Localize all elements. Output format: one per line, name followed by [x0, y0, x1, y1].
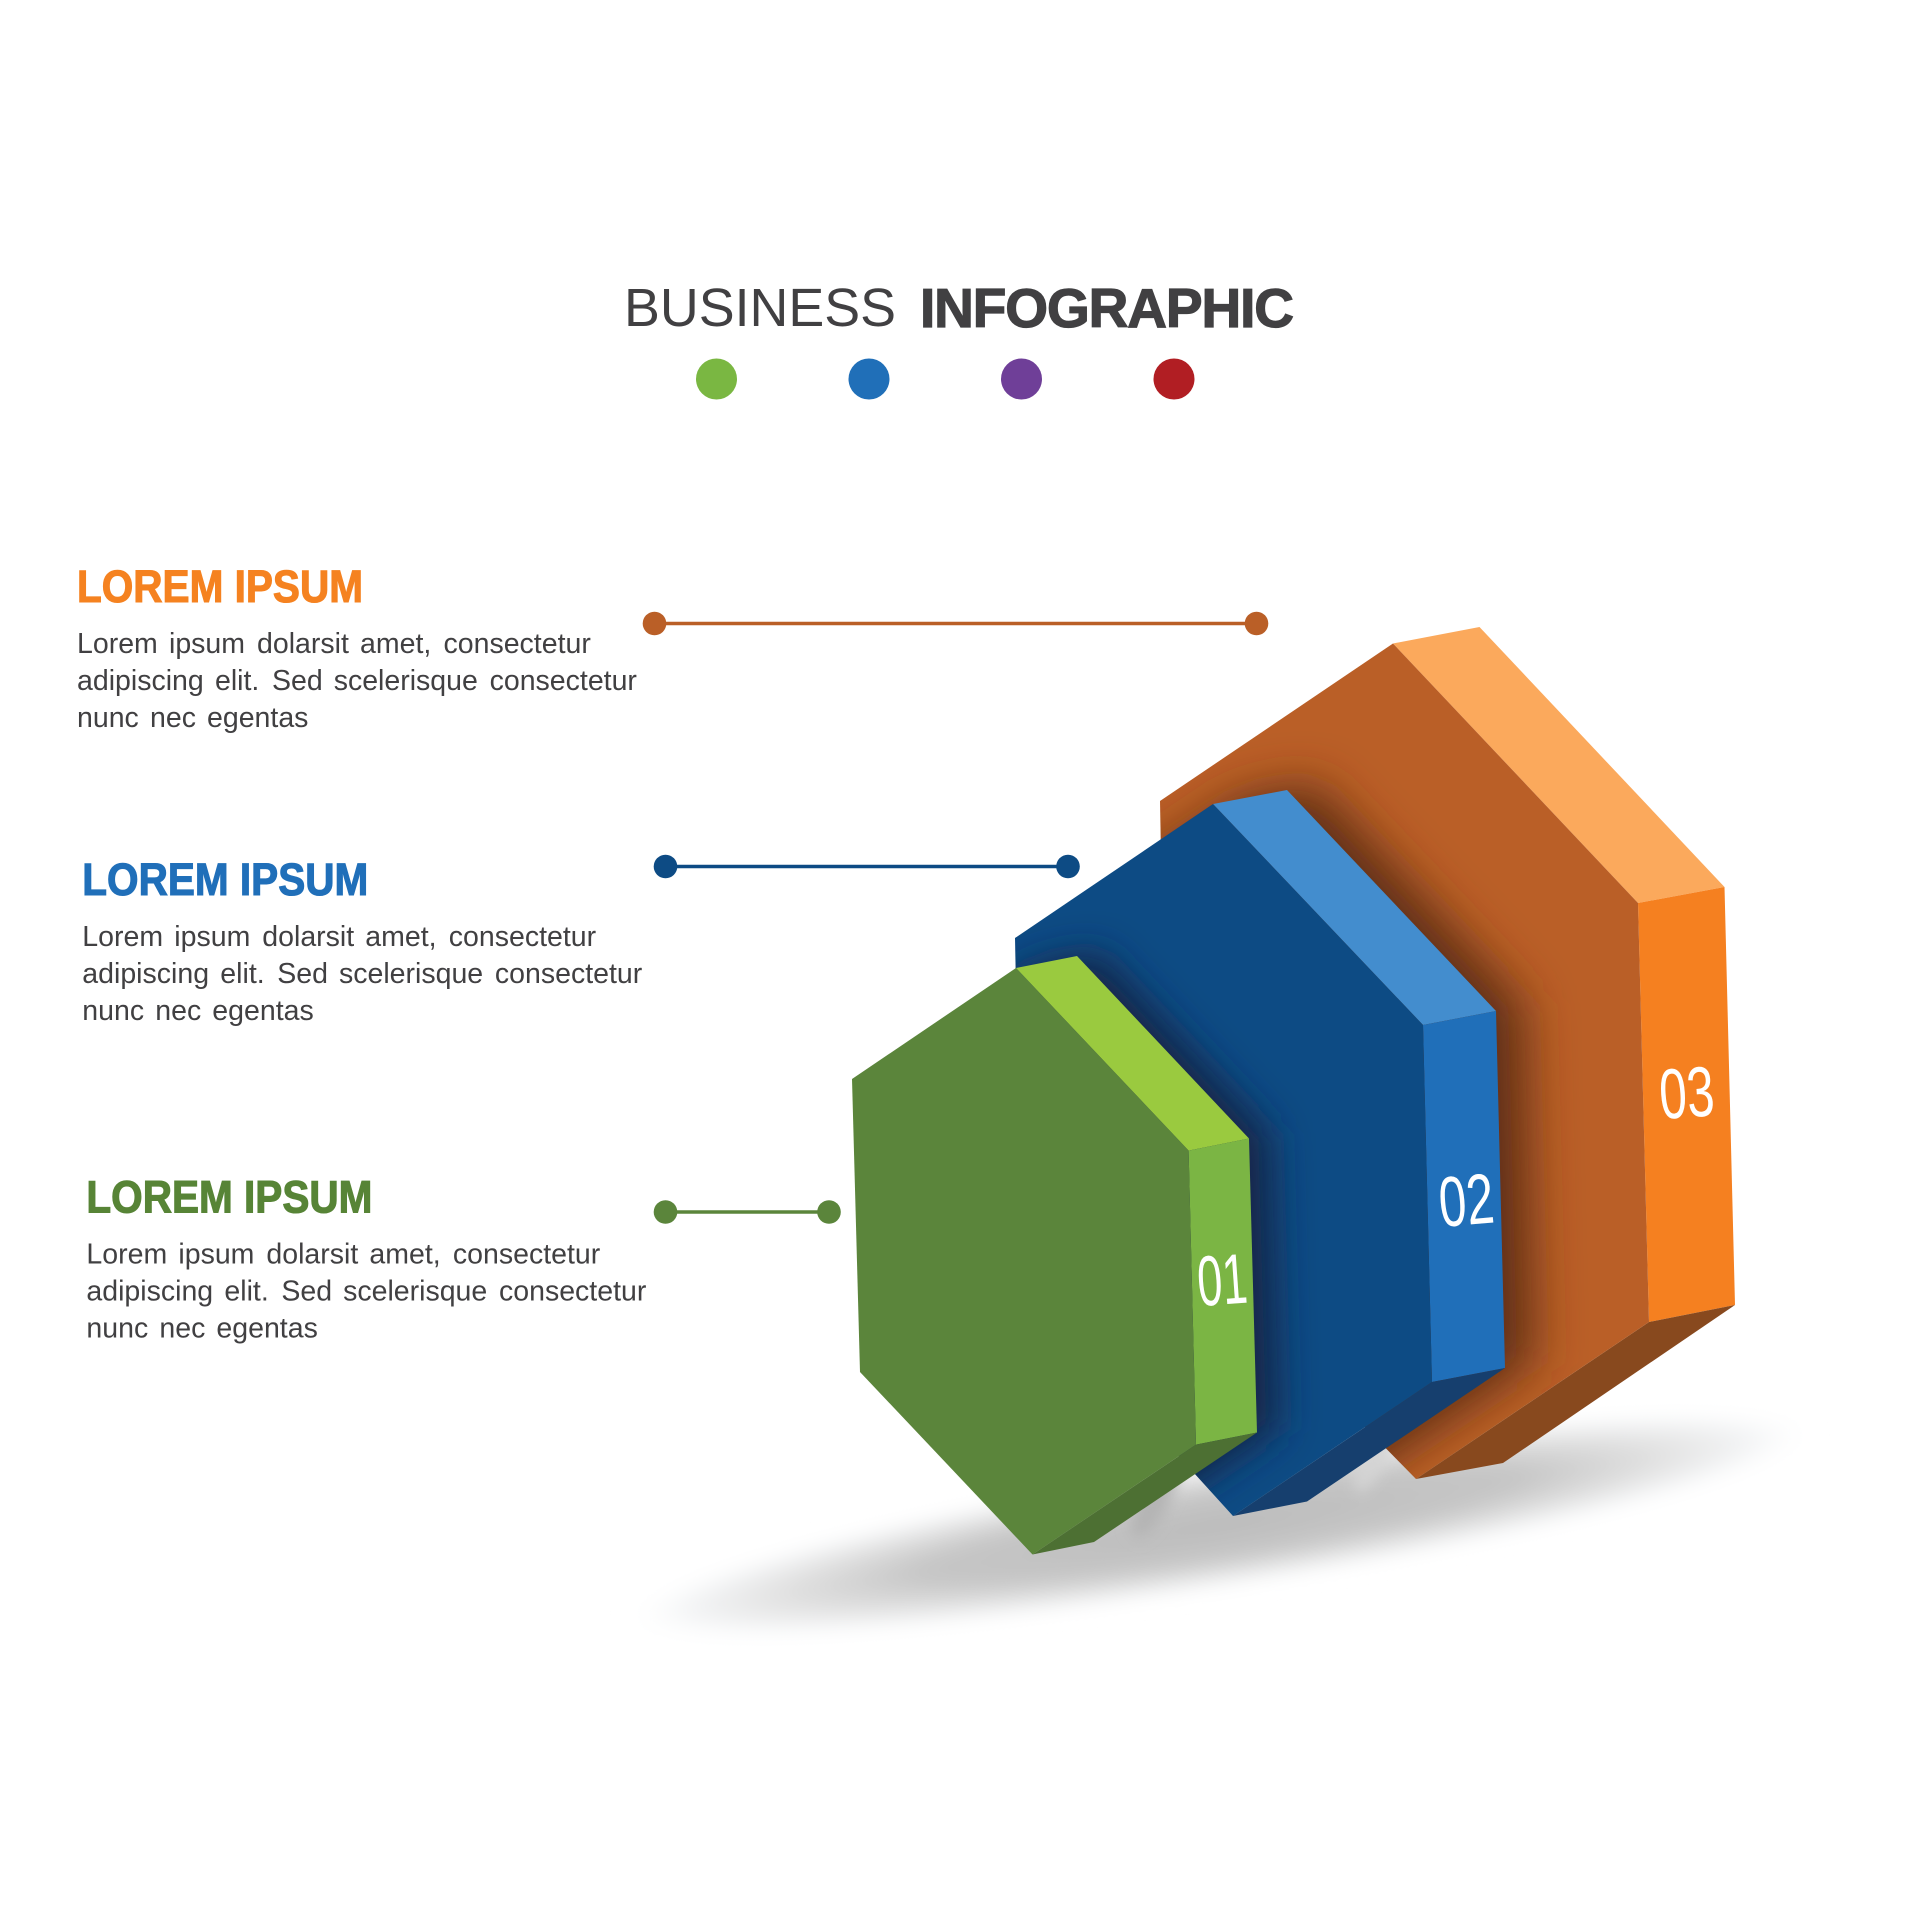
text block: blue: Sed	[277, 958, 328, 990]
orange side face	[1638, 887, 1735, 1322]
green top face	[1016, 956, 1249, 1151]
hexagon 02: blue	[1015, 790, 1505, 1516]
text block: green: consectetur	[499, 1276, 647, 1308]
text block: green: LOREM IPSUM	[86, 1172, 372, 1222]
text block: green: consectetur	[453, 1238, 601, 1270]
text block: blue: dolarsit	[262, 921, 354, 953]
orange top face	[1393, 627, 1724, 903]
connector: green	[654, 1200, 841, 1224]
text block: green: amet,	[369, 1238, 441, 1270]
orange front face	[1160, 644, 1649, 1479]
text block: orange: ipsum	[169, 628, 245, 660]
text block: orange: Sed	[272, 665, 323, 697]
text block: blue: Lorem	[82, 921, 163, 953]
blue side face	[1423, 1011, 1505, 1382]
blue bottom face	[1233, 1368, 1505, 1516]
text block: orange: Lorem	[77, 628, 158, 660]
text block: green: egentas	[216, 1312, 318, 1344]
text block: green: Lorem	[86, 1238, 167, 1270]
text block: green: ipsum	[178, 1238, 254, 1270]
text block: blue: nec	[155, 995, 201, 1027]
text block: green: nunc	[86, 1312, 148, 1344]
blue front face	[1015, 804, 1432, 1516]
number 01: 01	[1195, 1240, 1250, 1322]
text block: orange: scelerisque	[334, 665, 478, 697]
number 03: 03	[1657, 1052, 1717, 1135]
text block: orange: dolarsit	[257, 628, 349, 660]
connector: blue	[654, 855, 1080, 878]
text block: blue	[82, 854, 643, 1027]
text block: green: Sed	[281, 1276, 332, 1308]
text block: orange: elit.	[215, 665, 259, 697]
legend dots	[696, 358, 1194, 400]
text block: orange: consectetur	[490, 665, 637, 697]
title: BUSINESS	[624, 278, 896, 338]
text block: orange	[77, 561, 637, 734]
text block: blue: nunc	[82, 995, 144, 1027]
text block: blue: egentas	[212, 995, 314, 1027]
text block: orange: nec	[150, 702, 196, 734]
text block: green: dolarsit	[266, 1238, 358, 1270]
text block: blue: adipiscing	[82, 958, 209, 990]
hexagon 03: orange	[1160, 627, 1735, 1479]
green front face	[852, 968, 1196, 1554]
number 02: 02	[1436, 1159, 1497, 1243]
text block: blue: elit.	[220, 958, 265, 990]
text block: orange: consectetur	[444, 628, 591, 660]
text block: blue: scelerisque	[339, 958, 483, 990]
title: INFOGRAPHIC	[920, 277, 1294, 339]
text block: green: nec	[159, 1312, 205, 1344]
text block: orange: adipiscing	[77, 665, 204, 697]
orange bottom face	[1416, 1305, 1735, 1479]
green side face	[1189, 1138, 1257, 1445]
text block: blue: consectetur	[495, 958, 643, 990]
ground shadow	[612, 1367, 1828, 1683]
shadow cast on blue	[1016, 936, 1298, 1496]
text block: green: adipiscing	[86, 1276, 213, 1308]
text block: orange: nunc	[77, 702, 139, 734]
green bottom face	[1032, 1432, 1257, 1554]
text block: orange: egentas	[207, 702, 308, 734]
text block: orange: amet,	[360, 628, 431, 660]
text block: green: scelerisque	[343, 1276, 487, 1308]
text block: green	[86, 1172, 647, 1344]
connector: orange	[643, 612, 1268, 635]
text block: blue: LOREM IPSUM	[82, 854, 368, 905]
blue top face	[1213, 790, 1496, 1025]
text block: green: elit.	[224, 1276, 269, 1308]
text block: blue: amet,	[365, 921, 437, 953]
text block: orange: LOREM IPSUM	[77, 561, 363, 612]
title	[624, 277, 1294, 339]
hexagon 01: green	[852, 956, 1257, 1554]
shadow cast on orange	[1160, 758, 1564, 1478]
text block: blue: consectetur	[449, 921, 597, 953]
text block: blue: ipsum	[174, 921, 250, 953]
